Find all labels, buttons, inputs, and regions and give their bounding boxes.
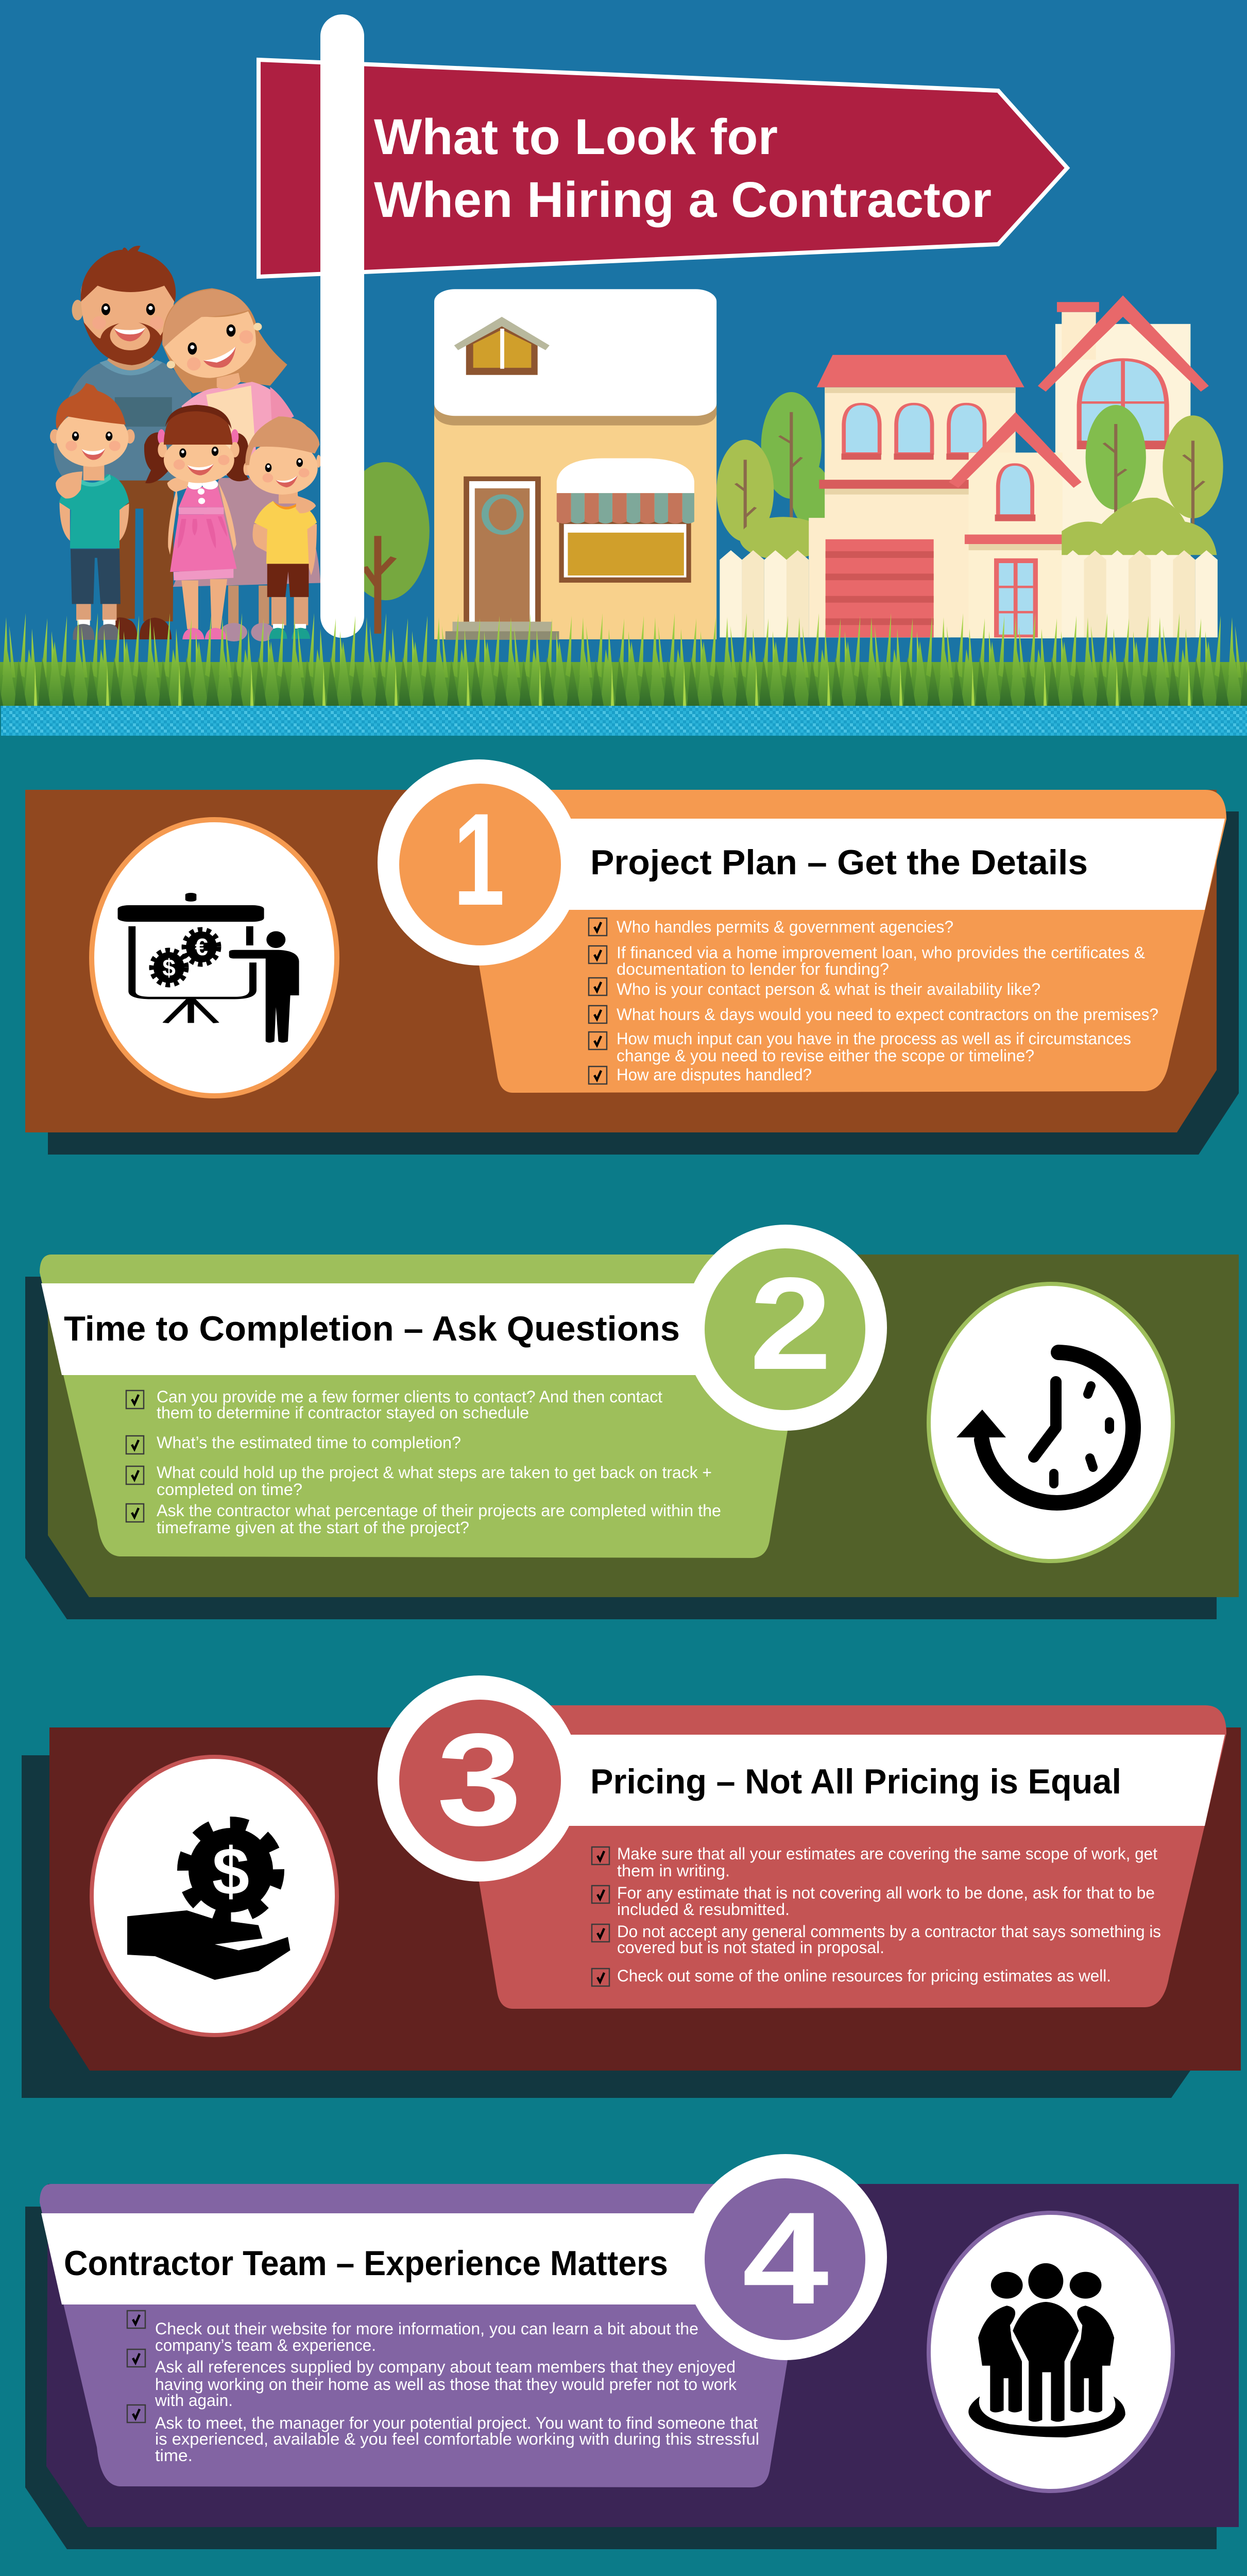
heading: Time to Completion – Ask Questions (64, 1309, 680, 1348)
panel shadow (25, 2207, 1217, 2549)
number badge: 3 (437, 1706, 522, 1853)
sign arrow shape (259, 60, 1067, 277)
illustration: small shop building (434, 289, 716, 640)
icon: presentation board (92, 820, 337, 1096)
checklist: included & resubmitted. (617, 1900, 790, 1919)
icon: team of people (929, 2213, 1173, 2491)
checklist: time. (155, 2446, 193, 2465)
panel light card (464, 1705, 1226, 2009)
checklist: Check out some of the online resources for pricing estimates as well. (617, 1967, 1111, 1985)
panel shadow (48, 811, 1239, 1155)
checklist (127, 2311, 759, 2465)
panel shadow (22, 1755, 1190, 2098)
panel 2: time to completion (25, 1225, 1239, 1619)
checklist: with again. (155, 2391, 233, 2410)
panel base (46, 2184, 1239, 2527)
checklist: covered but is not stated in proposal. (617, 1938, 884, 1957)
illustration: tree behind post (342, 462, 430, 634)
number badge (684, 1225, 887, 1431)
heading band (567, 819, 1225, 910)
checklist: is experienced, available & you feel comfortable working with during this stressful (155, 2430, 759, 2448)
number badge (378, 759, 580, 965)
number badge (684, 2154, 887, 2360)
checklist (126, 1387, 721, 1537)
checklist: Check out their website for more information, you can learn a bit about the (155, 2319, 698, 2338)
main title: When Hiring a Contractor (374, 172, 992, 228)
panel 1: project plan (25, 759, 1239, 1155)
checklist: Ask all references supplied by company about team members that they enjoyed (155, 2358, 736, 2376)
heading band (41, 1283, 721, 1375)
checklist: Can you provide me a few former clients to contact? And then contact (157, 1387, 662, 1406)
panel base (49, 1727, 1241, 2071)
panel light card (40, 1255, 788, 1558)
checklist: What could hold up the project & what steps are taken to get back on track + (157, 1463, 712, 1482)
checklist: having working on their home as well as those that they would prefer not to work (155, 2375, 737, 2394)
icon: hand holding dollar gear (92, 1757, 337, 2035)
sign post (320, 14, 364, 638)
heading band (41, 2213, 721, 2304)
checklist: If financed via a home improvement loan, who provides the certificates & (617, 943, 1145, 962)
heading: Contractor Team – Experience Matters (64, 2244, 668, 2283)
heading: Project Plan – Get the Details (590, 843, 1088, 882)
water strip (1, 706, 1247, 736)
main title (374, 109, 992, 228)
checklist: documentation to lender for funding? (617, 960, 889, 978)
number badge: 1 (453, 786, 505, 933)
checklist: company’s team & experience. (155, 2336, 376, 2354)
checklist: timeframe given at the start of the project? (157, 1518, 469, 1537)
checklist: What hours & days would you need to expect contractors on the premises? (617, 1005, 1158, 1024)
hero section (0, 0, 1247, 736)
icon: presentation board: € (195, 934, 208, 960)
illustration: family (50, 246, 321, 641)
checklist: Who handles permits & government agencies? (617, 918, 953, 936)
panel base (25, 790, 1217, 1132)
checklist: Make sure that all your estimates are covering the same scope of work, get (617, 1844, 1157, 1863)
checklist: For any estimate that is not covering all work to be done, ask for that to be (617, 1884, 1155, 1902)
grass (0, 613, 1247, 706)
checklist: change & you need to revise either the scope or timeline? (617, 1046, 1034, 1065)
panel base (48, 1255, 1239, 1597)
icon: hand holding dollar gear: $ (212, 1834, 249, 1909)
panel shadow (25, 1277, 1217, 1619)
heading band (567, 1735, 1225, 1826)
checklist: completed on time? (157, 1480, 302, 1499)
checklist: Who is your contact person & what is their availability like? (617, 980, 1040, 998)
checklist: How much input can you have in the process as well as if circumstances (617, 1029, 1131, 1048)
checklist (592, 1844, 1161, 1986)
heading: Pricing – Not All Pricing is Equal (590, 1762, 1121, 1801)
sky background (0, 0, 1247, 706)
checklist: Ask to meet, the manager for your potential project. You want to find someone that (155, 2414, 758, 2432)
illustration: trees and house with fence (716, 295, 1223, 638)
main title: What to Look for (374, 109, 778, 165)
panel light card (40, 2184, 788, 2487)
checklist: them to determine if contractor stayed on schedule (157, 1403, 529, 1422)
checklist: Ask the contractor what percentage of their projects are completed within the (157, 1501, 721, 1520)
checklist: What’s the estimated time to completion? (157, 1433, 461, 1452)
icon: presentation board: $ (162, 954, 176, 981)
checklist (589, 918, 1158, 1084)
checklist: Do not accept any general comments by a contractor that says something is (617, 1922, 1161, 1941)
panel 3: pricing (22, 1675, 1241, 2098)
checklist: them in writing. (617, 1861, 730, 1880)
panel light card (464, 790, 1226, 1093)
panel 4: contractor team (25, 2154, 1239, 2549)
number badge: 4 (742, 2185, 829, 2332)
icon: clock with arrow (929, 1284, 1173, 1561)
number badge: 2 (749, 1250, 832, 1397)
checklist: How are disputes handled? (617, 1065, 812, 1084)
number badge (378, 1675, 580, 1882)
